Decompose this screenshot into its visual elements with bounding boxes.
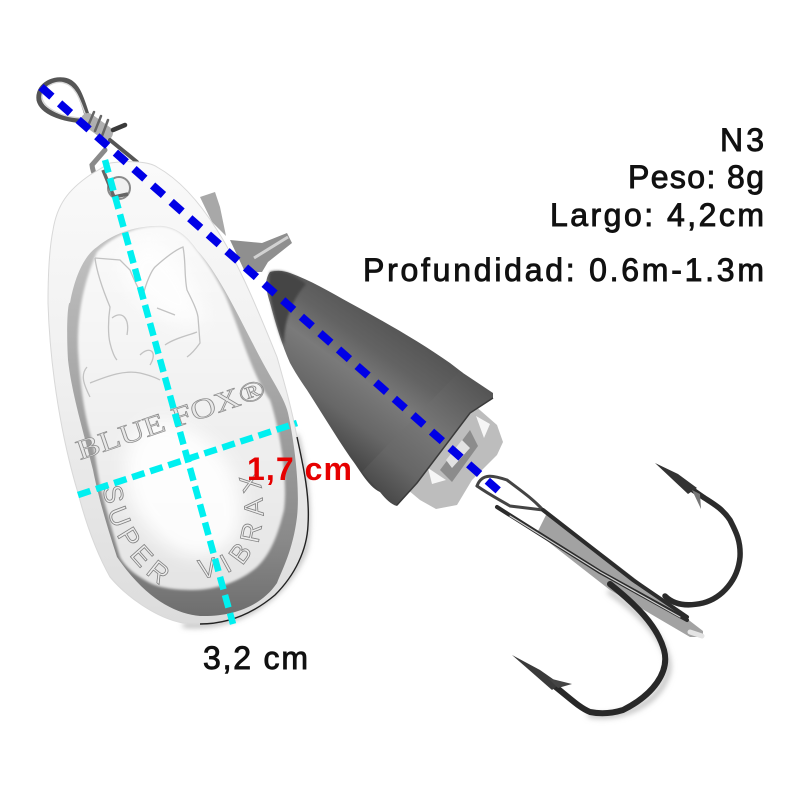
lower hook xyxy=(552,584,665,713)
lure body: dark weighted bullet with fins and bead xyxy=(200,192,503,509)
length: Largo: 4,2cm xyxy=(550,197,764,233)
soft shadow xyxy=(590,592,668,716)
embossed fox logo xyxy=(83,247,200,397)
shank xyxy=(497,507,687,620)
swivel and clevis wire xyxy=(39,80,137,192)
specifications text block xyxy=(363,122,764,288)
cyan dashed line: blade width xyxy=(78,423,297,495)
blade plate xyxy=(48,162,308,623)
label: blade length 3,2 cm: 3,2 cm xyxy=(203,640,308,676)
blade shadow xyxy=(183,435,307,626)
collar xyxy=(362,371,493,506)
fins xyxy=(200,192,292,272)
embossed text: BLUE FOX: BLUE FOX® xyxy=(72,373,270,467)
upper hook xyxy=(665,488,740,605)
inner panel rim xyxy=(67,226,298,616)
weight: Peso: 8g xyxy=(628,159,764,195)
bullet xyxy=(266,271,463,493)
spinner blade xyxy=(48,161,313,631)
blade dark edge xyxy=(200,437,308,624)
embossed text: VIBRAX: VIBRAX xyxy=(196,474,264,578)
label: blade width 1,7 cm: 1,7 cm xyxy=(247,451,352,487)
lure hole xyxy=(108,177,130,199)
blue dashed line: total length xyxy=(41,87,500,492)
embossed text: SUPER: SUPER xyxy=(103,486,168,586)
treble hook xyxy=(477,463,740,716)
eye xyxy=(477,476,543,510)
shank sleeve xyxy=(537,513,703,637)
model: N3 xyxy=(720,122,764,158)
depth: Profundidad: 0.6m-1.3m xyxy=(363,252,764,288)
cyan dashed line: blade length xyxy=(105,160,233,624)
inner panel highlight xyxy=(78,226,285,590)
bead xyxy=(408,404,503,509)
